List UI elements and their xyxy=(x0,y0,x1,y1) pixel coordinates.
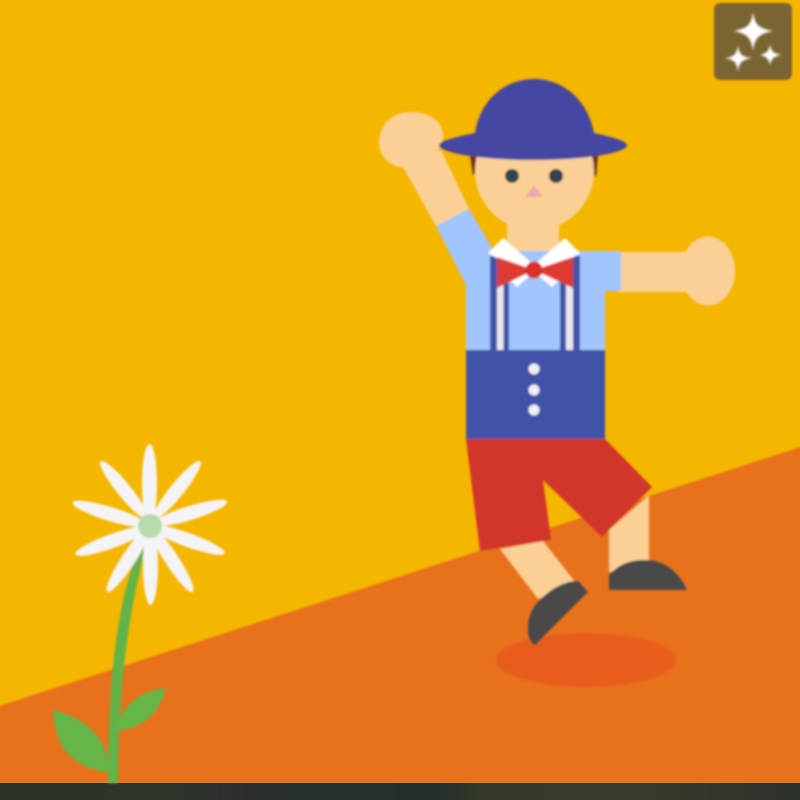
left shoe xyxy=(528,581,588,645)
hat xyxy=(439,79,627,160)
neck xyxy=(507,215,559,251)
right shoe xyxy=(609,560,687,590)
flower petals xyxy=(71,444,229,605)
red shorts xyxy=(466,439,652,551)
sparkle icons xyxy=(725,12,781,72)
flower xyxy=(53,444,229,783)
head xyxy=(475,112,594,230)
overalls bib xyxy=(466,350,605,440)
left leg xyxy=(500,541,576,599)
suspenders xyxy=(490,256,580,351)
hillside ground xyxy=(0,444,800,784)
flower stem xyxy=(108,545,146,783)
dark bottom strip xyxy=(0,783,800,800)
raised left hand xyxy=(379,112,443,168)
right leaf xyxy=(116,688,166,731)
boy character xyxy=(379,79,735,645)
hair xyxy=(470,155,598,177)
badge background xyxy=(714,3,792,80)
raised left arm xyxy=(403,150,469,226)
flower centre xyxy=(138,514,162,538)
eyes xyxy=(505,169,519,183)
nose xyxy=(525,185,543,197)
overall buttons xyxy=(528,364,540,374)
sparkle badge xyxy=(714,3,792,80)
shadow under boy xyxy=(496,633,676,687)
right hand xyxy=(681,236,735,306)
left leaf xyxy=(53,710,110,773)
shirt xyxy=(436,209,621,352)
right arm xyxy=(618,252,698,292)
collar xyxy=(488,238,580,287)
right leg xyxy=(609,495,649,572)
bow tie xyxy=(497,257,573,288)
